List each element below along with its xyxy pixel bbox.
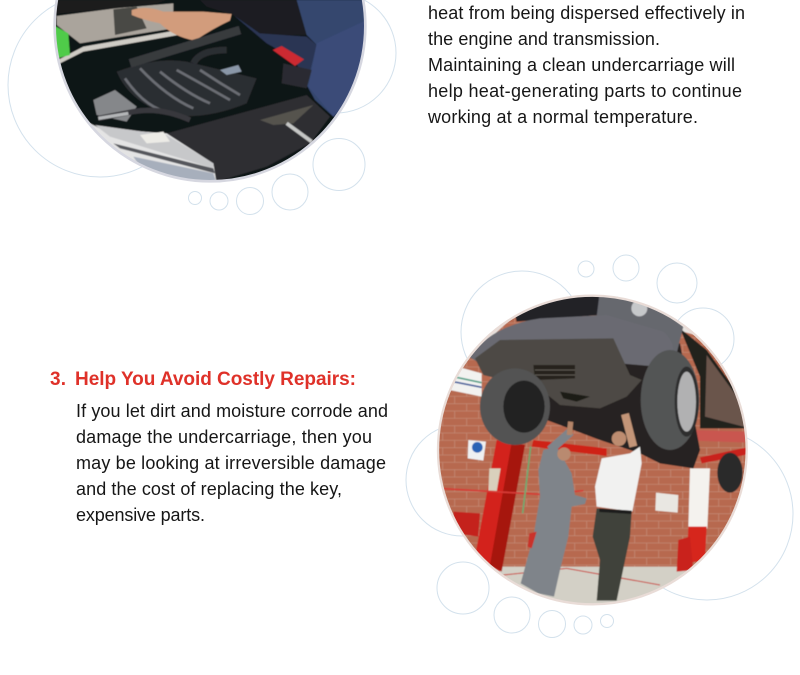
text block: engine heat paragraph: working at a normal temperature. bbox=[427, 107, 698, 127]
text block: engine heat paragraph bbox=[427, 3, 745, 127]
text block: costly repairs paragraph: and the cost of replacing the key, bbox=[76, 479, 342, 499]
text block: costly repairs paragraph: damage the undercarriage, then you bbox=[76, 427, 372, 447]
heading: help you avoid costly repairs: Help You Avoid Costly Repairs: bbox=[75, 369, 356, 390]
photo: mechanics under car on lift bbox=[433, 283, 753, 610]
text block: costly repairs paragraph: If you let dirt and moisture corrode and bbox=[76, 401, 388, 421]
text block: engine heat paragraph: help heat-generating parts to continue bbox=[428, 81, 742, 101]
text block: engine heat paragraph: Maintaining a clean undercarriage will bbox=[428, 55, 735, 75]
text block: costly repairs paragraph: expensive parts. bbox=[76, 505, 205, 525]
text block: engine heat paragraph: the engine and transmission. bbox=[428, 29, 660, 49]
bubbles: lift photo bbox=[406, 255, 793, 638]
text block: engine heat paragraph: heat from being dispersed effectively in bbox=[428, 3, 745, 23]
bubbles: engine photo bbox=[8, 0, 396, 214]
photo: mechanic working on engine bbox=[50, 0, 370, 187]
heading: help you avoid costly repairs: 3. bbox=[50, 369, 66, 390]
text block: costly repairs paragraph: may be looking at irreversible damage bbox=[76, 453, 386, 473]
text block: costly repairs paragraph bbox=[76, 401, 388, 525]
